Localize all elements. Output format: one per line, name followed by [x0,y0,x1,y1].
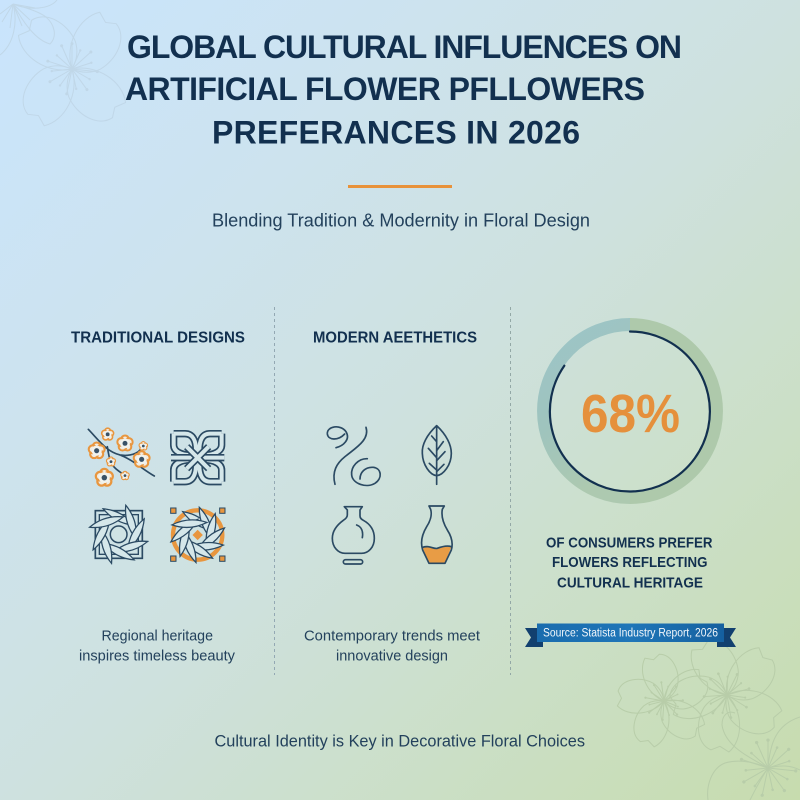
icon: circular weave knot [89,504,149,564]
icon: leaf [422,426,451,484]
caption: traditional [79,627,235,664]
stat description: OF CONSUMERS PREFER [546,534,713,551]
panel: modern aesthetics [304,330,481,664]
icon: cherry blossom branch [88,428,154,486]
icon: square interlace knot [171,434,224,482]
title: ARTIFICIAL FLOWER PFLLOWERS [125,71,645,107]
caption: modern: innovative design [336,647,448,664]
caption: traditional: Regional heritage [102,627,213,644]
icon: tall vase with orange fill [422,506,452,563]
decoration: cherry blossoms bottom right [608,619,800,800]
icon: round vase [332,507,374,564]
heading: modern aesthetics: MODERN AEETHETICS [313,330,477,346]
caption: traditional: inspires timeless beauty [79,647,235,664]
panel: traditional designs [71,330,245,664]
icon: swirls [327,427,380,485]
title accent rule [348,185,452,188]
heading: traditional designs: TRADITIONAL DESIGNS [71,330,245,346]
caption: modern: Contemporary trends meet [304,627,481,644]
donut chart: 68 percent [544,324,716,498]
title [125,29,682,150]
stat description: FLOWERS REFLECTING [552,554,708,571]
icon: orange accented knot [169,506,227,564]
footer tagline: Cultural Identity is Key in Decorative Floral Choices [214,733,585,751]
caption: modern [304,627,481,664]
source ribbon: Source: Statista Industry Report, 2026 [543,628,718,640]
title: GLOBAL CULTURAL INFLUENCES ON [127,29,682,65]
title: PREFERANCES IN 2026 [212,114,580,150]
value: 68%: 68% [581,384,680,444]
source ribbon [525,624,736,647]
panel: statistic [525,324,736,647]
decoration: cherry blossoms top left [0,0,132,132]
stat description: CULTURAL HERITAGE [557,574,703,591]
stat description [546,534,713,591]
subtitle: Blending Tradition & Modernity in Floral Design [212,210,590,231]
